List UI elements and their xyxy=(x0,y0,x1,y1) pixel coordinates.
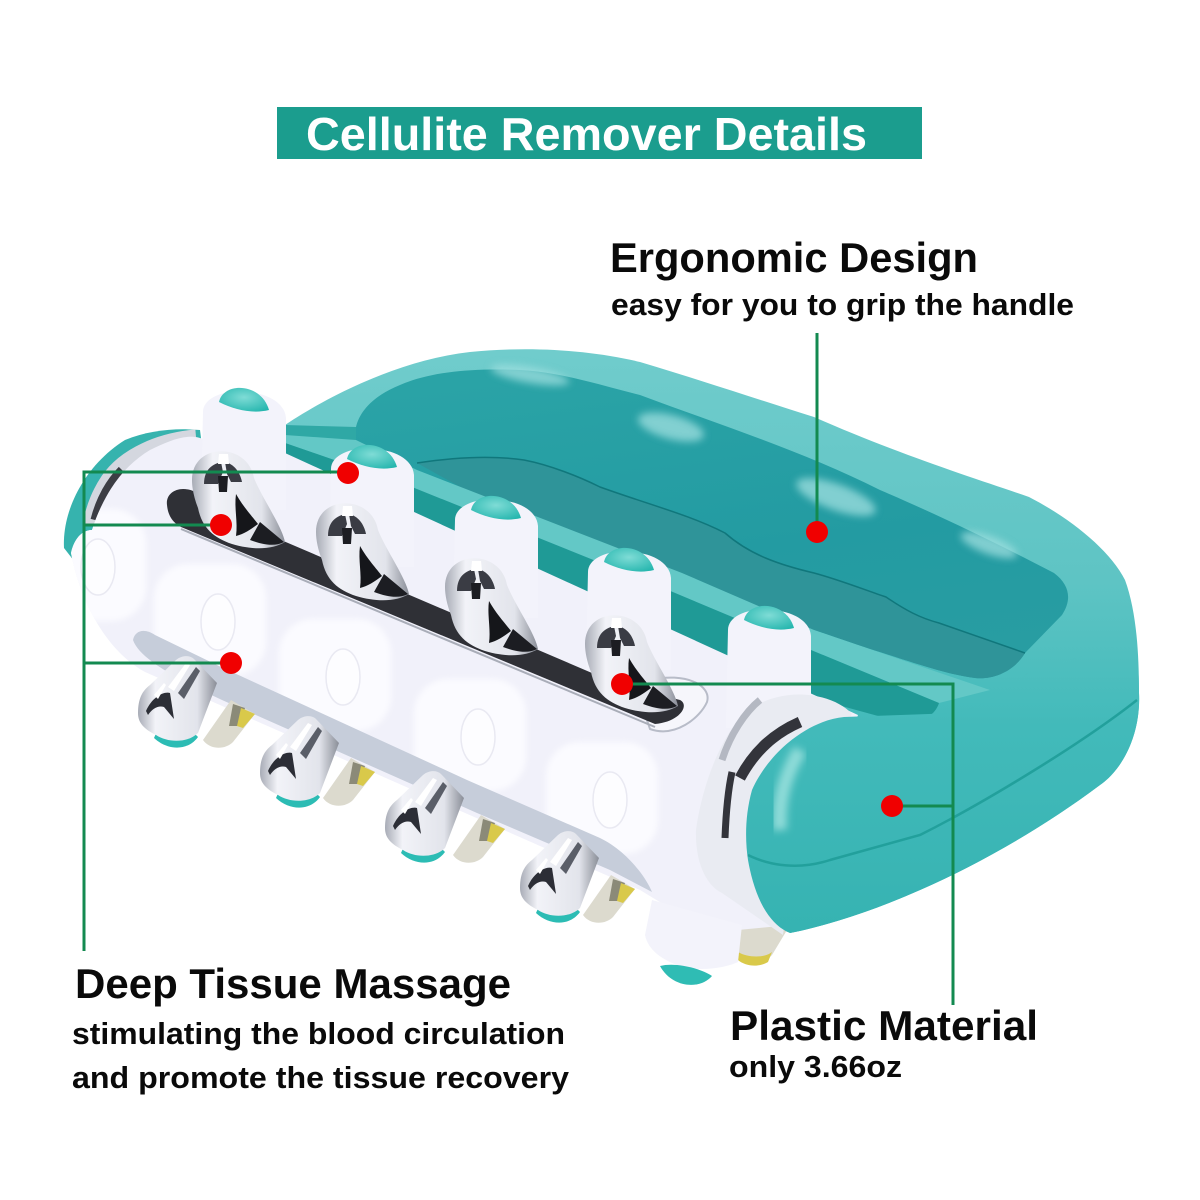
lower white massage studs xyxy=(34,509,658,854)
left end cap xyxy=(64,429,205,575)
end post with teal tip xyxy=(645,900,742,985)
callout: plastic material leader xyxy=(611,673,953,1005)
callout: deep tissue massage leader xyxy=(84,462,359,951)
inner ledge: light band xyxy=(285,435,990,703)
title banner: Cellulite Remover Details xyxy=(306,108,867,160)
product illustration: massage roller xyxy=(34,349,1139,985)
right end cap with seam xyxy=(746,640,1139,933)
end cream pin xyxy=(738,925,790,966)
text: ergonomic design: easy for you to grip the handle xyxy=(611,287,1074,322)
text: plastic material xyxy=(729,1002,1038,1084)
lower chrome strip xyxy=(133,631,652,892)
callout: ergonomic design leader xyxy=(806,333,828,543)
lower cream pins xyxy=(203,700,635,923)
text: deep tissue massage xyxy=(72,960,570,1095)
text: deep tissue massage: and promote the tissue recovery xyxy=(72,1060,570,1095)
text: ergonomic design: Ergonomic Design xyxy=(610,234,978,281)
lower chrome pins xyxy=(138,656,599,923)
right chrome ring xyxy=(696,694,852,935)
inner ledge: left block xyxy=(285,425,356,470)
well floor seam xyxy=(417,457,1025,678)
text: deep tissue massage: Deep Tissue Massage xyxy=(75,960,511,1007)
upper chrome pins xyxy=(192,451,678,712)
upper chrome slot xyxy=(167,489,708,731)
text: plastic material: only 3.66oz xyxy=(729,1049,902,1084)
white posts with teal caps xyxy=(201,388,811,728)
inner ledge: dark face xyxy=(285,443,939,722)
handle inner well xyxy=(356,360,1068,678)
text: ergonomic design xyxy=(610,234,1074,322)
well highlights xyxy=(489,360,1020,564)
white roller body xyxy=(71,437,858,940)
text: deep tissue massage: stimulating the blood circulation xyxy=(72,1016,565,1051)
handle outer shell xyxy=(285,349,1139,933)
infographic canvas xyxy=(64,107,1140,1094)
text: plastic material: Plastic Material xyxy=(730,1002,1038,1049)
